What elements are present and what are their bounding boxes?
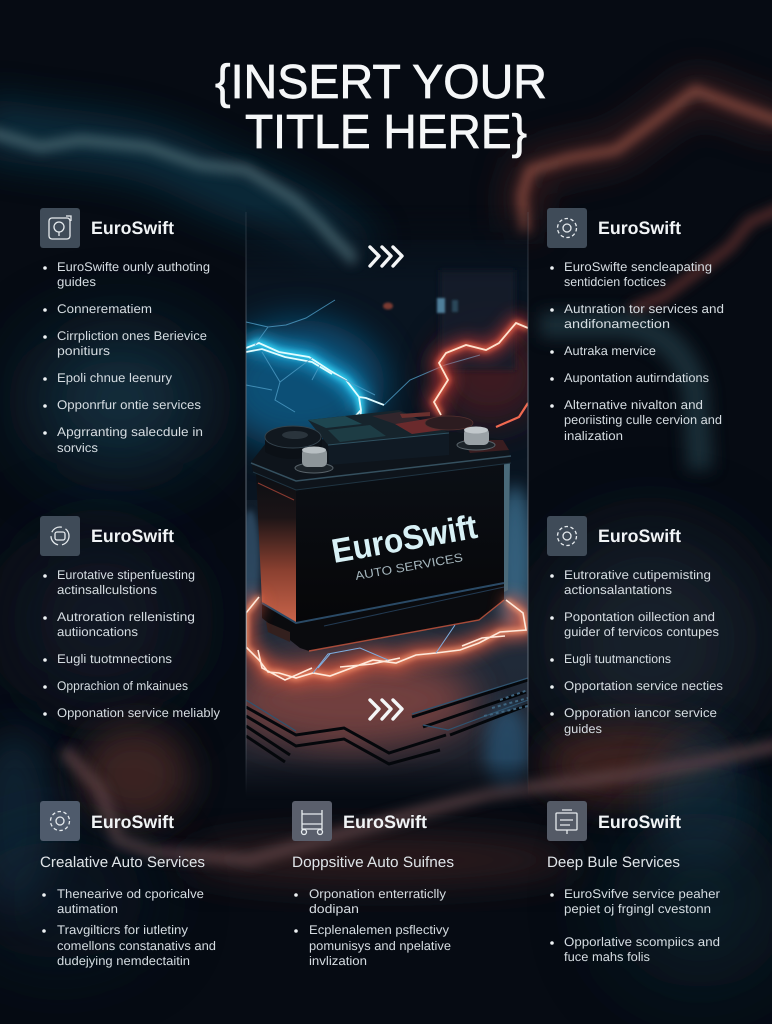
icon: gear — [40, 801, 80, 841]
bullet list — [42, 887, 216, 968]
bullet list: Aupontation autirndations — [564, 371, 709, 385]
icon: cart frame — [292, 801, 332, 841]
bullet list: sorvics — [57, 441, 98, 455]
bullet list: Opprachion of mkainues — [57, 679, 188, 693]
side face — [256, 472, 296, 623]
heading: EuroSwift — [343, 812, 427, 832]
top block — [328, 430, 449, 464]
bullet list: invlization — [309, 954, 367, 968]
battery — [251, 410, 511, 651]
bullet list: Opporation iancor service — [564, 706, 717, 720]
panel: middle right service — [547, 516, 723, 736]
bullet list: actionsalantations — [564, 583, 672, 597]
circuit board floor — [225, 485, 533, 800]
bullet list: peoriisting culle cervion and — [564, 413, 722, 427]
panel: top right service — [547, 208, 724, 443]
bullet list: Travgilticrs for iutletiny — [57, 923, 189, 937]
bullet list — [43, 568, 221, 720]
bullet list: actinsallculstions — [57, 583, 157, 597]
bullet list: Opponrfur ontie services — [57, 398, 201, 412]
arrow: top chevrons — [370, 247, 402, 266]
battery label: AUTO SERVICES — [354, 550, 464, 583]
bullet list: Thenearive od cporicalve — [57, 887, 204, 901]
bullet list — [294, 887, 451, 968]
bullet list: fuce mahs folis — [564, 950, 650, 964]
subheading: Deep Bule Services — [547, 854, 680, 871]
center image panel: battery scene — [246, 212, 528, 790]
panel: bottom center service — [292, 801, 454, 968]
bullet list: pepiet oj frgingl cvestonn — [564, 902, 711, 916]
bullet list: pomunisys and npelative — [309, 939, 451, 953]
bullet list: guides — [57, 275, 96, 289]
bullet list: dodipan — [309, 902, 359, 916]
bullet list: Opportation service necties — [564, 679, 723, 693]
icon: document gear — [40, 208, 80, 248]
bullet list: Autraka mervice — [564, 344, 656, 358]
title — [215, 56, 547, 159]
subheading: Doppsitive Auto Suifnes — [292, 854, 454, 871]
lid — [251, 439, 510, 478]
panel: bottom right service — [547, 801, 720, 964]
bullet list: sentidcien foctices — [564, 275, 666, 289]
icon: cycle — [40, 516, 80, 556]
panel: top left service — [40, 208, 210, 455]
lightning: blue — [246, 300, 480, 416]
icon: gear — [547, 516, 587, 556]
bullet list: Eutrorative cutipemisting — [564, 568, 711, 582]
bullet list: guides — [564, 722, 602, 736]
bullet list — [550, 260, 724, 443]
panel: bottom left service — [40, 801, 216, 968]
icon: gear — [547, 208, 587, 248]
bullet list: Eurotative stipenfuesting — [57, 568, 195, 582]
subheading: Crealative Auto Services — [40, 854, 205, 871]
bullet list: autiioncations — [57, 625, 138, 639]
heading: EuroSwift — [598, 218, 681, 238]
bullet list: Connerematiem — [57, 302, 152, 316]
bullet list: EuroSwifte ounly authoting — [57, 260, 210, 274]
bullet list: Epoli chnue leenury — [57, 371, 173, 385]
bullet list: Eugli tuotmnections — [57, 652, 172, 666]
bullet list — [550, 887, 720, 964]
heading: EuroSwift — [91, 526, 174, 546]
bullet list: Apgrranting salecdule in — [57, 425, 203, 439]
bullet list — [43, 260, 210, 455]
panel edge lines — [246, 212, 528, 795]
bullet list: comellons constanativs and — [57, 939, 216, 953]
bullet list: Autroration rellenisting — [57, 610, 195, 624]
bullet list: Popontation oillection and — [564, 610, 715, 624]
front face — [296, 462, 505, 628]
right terminal — [457, 440, 495, 450]
lightning: ring — [246, 597, 526, 680]
bullet list: inalization — [564, 429, 623, 443]
title: {INSERT YOUR — [215, 56, 547, 109]
panel: middle left service — [40, 516, 221, 720]
bullet list: dudejying nemdectaitin — [57, 954, 190, 968]
bullet list: andifonamection — [564, 317, 670, 331]
heading: EuroSwift — [91, 218, 174, 238]
bullet list: Cirrpliction ones Berievice — [57, 329, 207, 343]
lightning: red — [434, 323, 528, 427]
bullet list: Opporlative scompiics and — [564, 935, 720, 949]
bullet list: Eugli tuutmanctions — [564, 652, 671, 666]
bullet list: Ecplenalemen psflectivy — [309, 923, 450, 937]
bullet list: Alternative nivalton and — [564, 398, 703, 412]
bullet list: ponitiurs — [57, 344, 110, 358]
battery label: EuroSwift — [329, 508, 480, 571]
bullet list: Orponation enterraticlly — [309, 887, 447, 901]
heading: EuroSwift — [91, 812, 174, 832]
heading: EuroSwift — [598, 812, 681, 832]
bullet list: Autnration tor services and — [564, 302, 724, 316]
bullet list: EuroSvifve service peaher — [564, 887, 720, 901]
bullet list — [550, 568, 723, 736]
bullet list: guider of tervicos contupes — [564, 625, 719, 639]
left terminal — [295, 463, 333, 473]
bullet list: Opponation service meliably — [57, 706, 221, 720]
icon: presentation board — [547, 801, 587, 841]
left ring post — [265, 437, 322, 444]
base — [262, 585, 504, 651]
battery label — [332, 515, 478, 580]
title: TITLE HERE} — [245, 106, 527, 159]
bullet list: EuroSwifte sencleapating — [564, 260, 712, 274]
arrow: bottom chevrons — [370, 700, 402, 719]
bullet list: autimation — [57, 902, 118, 916]
heading: EuroSwift — [598, 526, 681, 546]
